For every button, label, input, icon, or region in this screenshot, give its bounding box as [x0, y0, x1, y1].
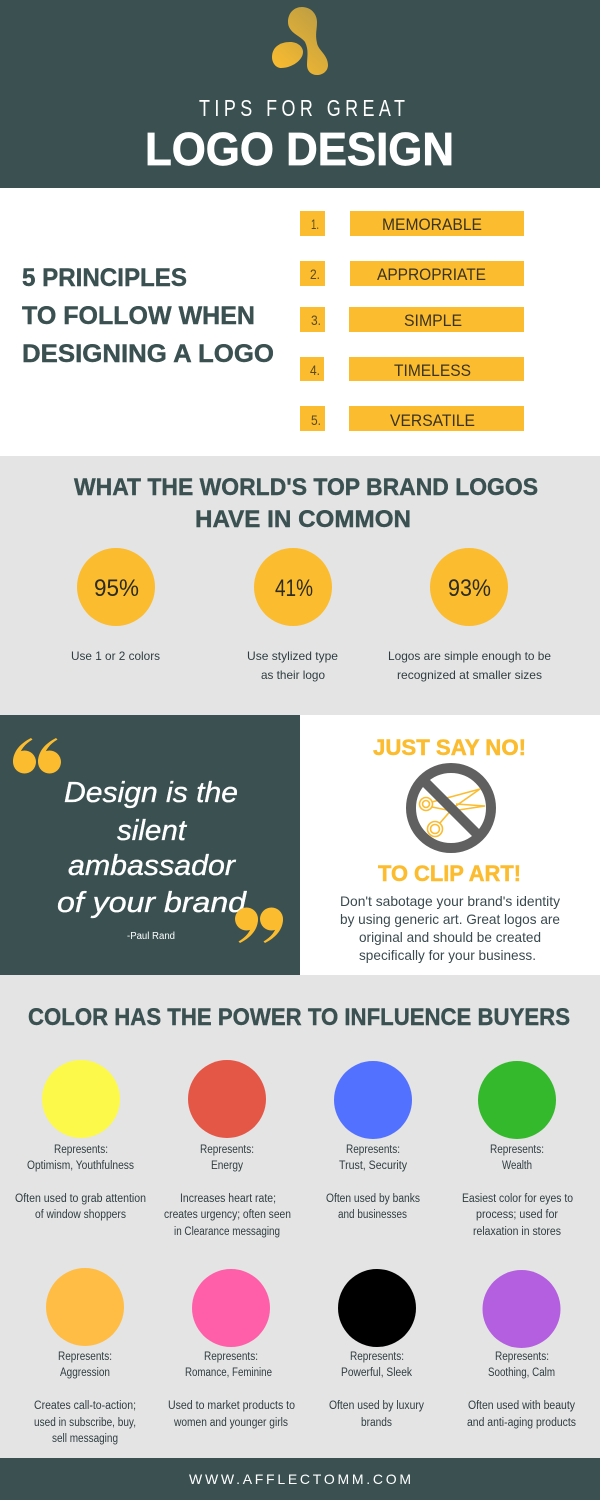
heading: what top brand logos have in common: WHAT THE WORLD'S TOP BRAND LOGOS [74, 474, 538, 501]
color card: yellow [15, 1060, 146, 1221]
clip art paragraph: original and should be created [359, 929, 541, 945]
list item 3: simple [300, 307, 524, 332]
stat: 93 percent: recognized at smaller sizes [397, 668, 542, 682]
heading: five principles: 5 PRINCIPLES [22, 264, 187, 292]
list item 4: timeless: 4. [310, 362, 320, 378]
panel: clip art warning [300, 715, 600, 975]
color card: red: Increases heart rate; [180, 1193, 276, 1205]
list item 2: appropriate: APPROPRIATE [377, 265, 486, 284]
stat: 41 percent [247, 548, 338, 682]
clip art paragraph: specifically for your business. [359, 947, 536, 963]
clip art paragraph: Don't sabotage your brand's identity [340, 893, 560, 909]
stat: 93 percent: Logos are simple enough to be [388, 649, 551, 663]
color card: black [329, 1269, 424, 1429]
clip art paragraph [340, 893, 560, 963]
list item 5: versatile: 5. [311, 412, 321, 428]
icon: scissors crossed out [411, 768, 491, 848]
color card: orange: Aggression [60, 1367, 110, 1379]
color card: black: Powerful, Sleek [341, 1367, 412, 1379]
color card: purple: and anti-aging products [467, 1417, 576, 1429]
list item 4: timeless: TIMELESS [394, 361, 471, 380]
color card: blue: Represents: [346, 1144, 400, 1156]
stat: 93 percent: 93% [448, 575, 491, 602]
color card: orange: Represents: [58, 1351, 112, 1363]
list item 4: timeless [300, 357, 524, 381]
color card: red: creates urgency; often seen [164, 1209, 291, 1221]
icon: opening quote mark [13, 738, 61, 774]
color card: yellow: Optimism, Youthfulness [27, 1160, 134, 1172]
panel: five principles [0, 188, 600, 456]
quote attribution: -Paul Rand [127, 931, 175, 942]
panel: top brand logos [0, 456, 600, 715]
color card: green: process; used for [476, 1209, 558, 1221]
color card: yellow: Represents: [54, 1144, 108, 1156]
panel: quote [0, 715, 300, 975]
list item 2: appropriate: 2. [310, 266, 320, 282]
quote text: ambassador [68, 850, 236, 882]
heading: five principles: TO FOLLOW WHEN [22, 302, 255, 330]
stat: 41 percent: Use stylized type [247, 649, 338, 663]
quote text [57, 777, 247, 919]
color card: black: Represents: [350, 1351, 404, 1363]
heading: five principles: DESIGNING A LOGO [22, 340, 274, 368]
color card: yellow: Often used to grab attention [15, 1193, 146, 1205]
color card: purple [467, 1270, 576, 1429]
color card: pink: Used to market products to [168, 1400, 295, 1412]
color card: pink: women and younger girls [173, 1417, 288, 1429]
stat: 95 percent [71, 548, 160, 663]
color card: red: Energy [211, 1160, 243, 1172]
color card: green: Wealth [502, 1160, 532, 1172]
list item 3: simple: 3. [311, 312, 321, 328]
stat: 95 percent: Use 1 or 2 colors [71, 649, 160, 663]
stat: 93 percent [388, 548, 551, 682]
quote text: of your brand [57, 887, 247, 919]
color card: blue: and businesses [338, 1209, 407, 1221]
color card: green: Represents: [490, 1144, 544, 1156]
footer website address: WWW.AFFLECTOMM.COM [189, 1471, 411, 1487]
title: logo design: LOGO DESIGN [145, 123, 454, 175]
color card: red: in Clearance messaging [174, 1226, 280, 1238]
color card: red [164, 1060, 291, 1238]
list item 1: memorable [300, 211, 524, 236]
icon: gold logo mark [272, 7, 328, 75]
color card: red: Represents: [200, 1144, 254, 1156]
heading: to clip art: TO CLIP ART! [378, 861, 521, 886]
color card: orange: Creates call-to-action; [34, 1400, 136, 1412]
list item 3: simple: SIMPLE [404, 311, 462, 330]
heading: what top brand logos have in common: HAVE IN COMMON [195, 506, 411, 533]
list item 2: appropriate [300, 261, 524, 286]
color card: blue: Often used by banks [326, 1193, 420, 1205]
color card: purple: Often used with beauty [468, 1400, 575, 1412]
color card: pink [168, 1269, 295, 1429]
list item 5: versatile [300, 406, 524, 431]
color card: blue: Trust, Security [339, 1160, 407, 1172]
quote text: Design is the [64, 777, 238, 809]
stat: 41 percent: 41% [275, 575, 313, 602]
quote text: silent [117, 815, 188, 847]
color card: purple: Soothing, Calm [488, 1367, 555, 1379]
title: tips for great: TIPS FOR GREAT [199, 96, 405, 122]
color card: green: Easiest color for eyes to [462, 1193, 573, 1205]
heading: just say no: JUST SAY NO! [373, 735, 526, 760]
list item 5: versatile: VERSATILE [390, 411, 475, 430]
panel: footer [0, 1458, 600, 1500]
stat: 41 percent: as their logo [261, 668, 325, 682]
heading: five principles [22, 264, 274, 368]
color card: black: brands [361, 1417, 392, 1429]
color card: orange [34, 1268, 136, 1445]
color card: pink: Romance, Feminine [185, 1367, 272, 1379]
color card: yellow: of window shoppers [35, 1209, 126, 1221]
color card: blue [326, 1061, 420, 1221]
color card: purple: Represents: [495, 1351, 549, 1363]
clip art paragraph: by using generic art. Great logos are [340, 911, 560, 927]
list item 1: memorable: 1. [311, 216, 319, 232]
color card: black: Often used by luxury [329, 1400, 424, 1412]
color card: green [462, 1061, 573, 1238]
color card: green: relaxation in stores [473, 1226, 561, 1238]
heading: what top brand logos have in common [74, 474, 538, 533]
list item 1: memorable: MEMORABLE [382, 215, 482, 234]
color card: orange: used in subscribe, buy, [34, 1417, 136, 1429]
heading: color influences buyers: COLOR HAS THE POWER TO INFLUENCE BUYERS [28, 1004, 570, 1031]
color card: pink: Represents: [204, 1351, 258, 1363]
panel: color psychology [0, 975, 600, 1458]
panel: header [0, 0, 600, 188]
stat: 95 percent: 95% [94, 575, 139, 602]
icon: closing quote mark [235, 908, 283, 943]
color card: orange: sell messaging [52, 1433, 118, 1445]
